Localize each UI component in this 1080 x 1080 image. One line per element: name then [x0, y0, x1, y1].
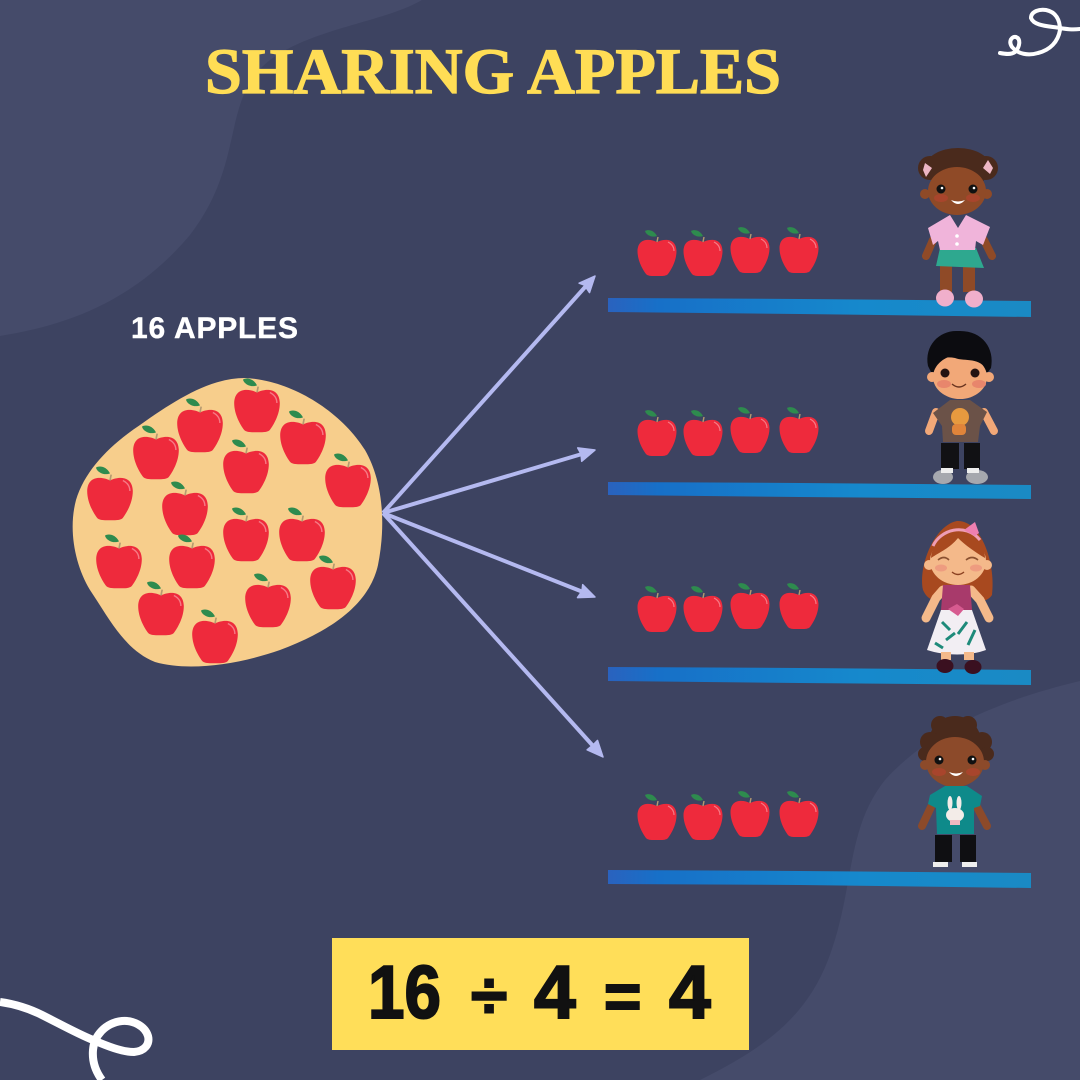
shelf 1	[608, 298, 1031, 317]
background shape: bottom right	[700, 681, 1080, 1080]
shelf 3	[608, 667, 1031, 685]
squiggle: bottom left	[0, 1002, 148, 1080]
child 1: girl in pink shirt	[918, 148, 998, 308]
equation box	[332, 938, 749, 1050]
title: SHARING APPLES	[205, 36, 781, 108]
row 1 apples	[638, 227, 818, 276]
equation box: =	[604, 960, 641, 1032]
apple pile: blob with 16 apples	[73, 378, 382, 666]
child 3: girl in floral dress	[922, 521, 993, 674]
row 3 apples	[638, 583, 818, 632]
equation box: 16	[368, 950, 441, 1034]
equation box: ÷	[471, 958, 507, 1032]
arrows from pile to children	[383, 276, 603, 757]
equation box: 4	[534, 950, 576, 1034]
label: 16 apples: 16 APPLES	[131, 312, 298, 345]
shelf 2	[608, 482, 1031, 499]
row 2 apples	[638, 407, 818, 456]
background shape: top left	[0, 0, 422, 336]
equation box: 4	[669, 950, 711, 1034]
shelf 4	[608, 870, 1031, 888]
row 4 apples	[638, 791, 818, 840]
squiggle: top right	[1000, 10, 1080, 54]
child 4: boy in teal shirt	[918, 716, 994, 867]
child 2: boy in brown shirt	[927, 331, 994, 484]
